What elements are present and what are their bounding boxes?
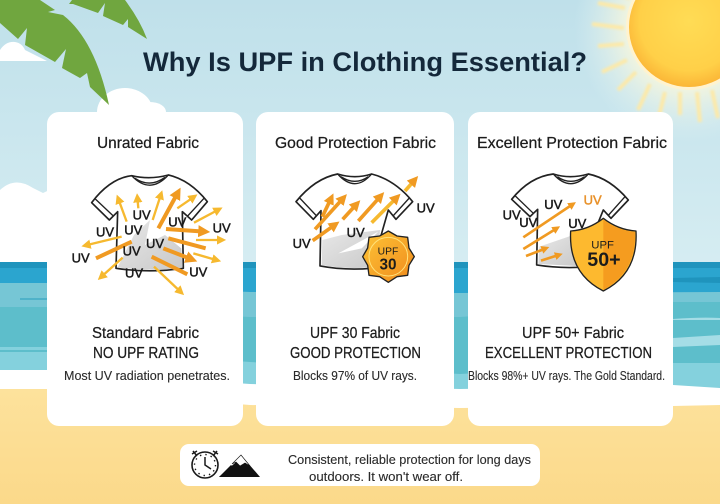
illustration: t-shirt with partial UV block: UV xyxy=(347,225,365,240)
illustration: t-shirt with partial UV block: UV xyxy=(293,236,311,251)
background: sand xyxy=(0,389,720,504)
text: standard fabric: Standard Fabric xyxy=(92,325,199,342)
text: good protection: GOOD PROTECTION xyxy=(290,345,421,362)
background: clouds xyxy=(0,42,166,270)
illustration: t-shirt with UV blocked by shield xyxy=(503,174,636,291)
text: most uv penetrates: Most UV radiation penetrates. xyxy=(64,368,230,383)
illustration: t-shirt with UV passing through: UV xyxy=(213,220,231,235)
badge: UPF 50+ shield: UPF xyxy=(591,240,614,252)
background: sea xyxy=(0,262,720,389)
badge: UPF 30 xyxy=(363,231,414,282)
heading: excellent protection fabric: Excellent Protection Fabric xyxy=(477,135,667,152)
background: sky xyxy=(0,0,720,270)
illustration: t-shirt with UV passing through: UV xyxy=(123,244,141,259)
illustration: t-shirt with UV passing through: UV xyxy=(125,265,143,280)
illustration: t-shirt with UV passing through xyxy=(72,175,231,290)
text: upf 50+ fabric: UPF 50+ Fabric xyxy=(522,325,624,342)
panel: good protection fabric xyxy=(256,112,454,426)
panel: excellent protection fabric xyxy=(468,112,673,426)
background: palm leaves xyxy=(0,0,147,105)
illustration: t-shirt with UV passing through: UV xyxy=(146,236,164,251)
illustration: t-shirt with UV passing through: UV xyxy=(72,250,90,265)
background: foam xyxy=(0,360,720,420)
callout bar: consistent protection xyxy=(180,444,540,486)
text: blocks 98%: Blocks 98%+ UV rays. The Gold Standard. xyxy=(468,368,665,383)
illustration: t-shirt with UV passing through: UV xyxy=(133,208,151,223)
icon: alarm clock xyxy=(192,451,218,478)
illustration: t-shirt with UV blocked by shield: UV xyxy=(503,208,521,223)
text: upf 30 fabric: UPF 30 Fabric xyxy=(310,325,400,342)
badge: UPF 30: UPF xyxy=(378,247,398,258)
heading: unrated fabric: Unrated Fabric xyxy=(97,135,199,152)
title: Why Is UPF in Clothing Essential? xyxy=(143,47,587,77)
text: callout line 2: outdoors. It won't wear off. xyxy=(309,469,463,484)
illustration: t-shirt with UV blocked by shield: UV xyxy=(544,197,563,212)
text: callout line 1: Consistent, reliable protection for long days xyxy=(288,452,531,467)
illustration: t-shirt with partial UV block xyxy=(293,174,435,282)
text: no upf rating: NO UPF RATING xyxy=(93,345,199,362)
panel: unrated fabric xyxy=(47,112,243,426)
illustration: t-shirt with UV blocked by shield: UV xyxy=(584,193,602,208)
illustration: t-shirt with UV passing through: UV xyxy=(168,214,187,229)
illustration: t-shirt with UV passing through: UV xyxy=(96,224,114,239)
icon: mountains xyxy=(219,455,260,477)
badge: UPF 50+ shield xyxy=(571,218,636,291)
heading: good protection fabric: Good Protection Fabric xyxy=(275,135,436,152)
text: excellent protection: EXCELLENT PROTECTION xyxy=(485,345,652,362)
illustration: t-shirt with partial UV block: UV xyxy=(417,200,435,215)
illustration: t-shirt with UV passing through: UV xyxy=(124,223,143,238)
badge: UPF 50+ shield: 50+ xyxy=(587,250,621,271)
background: sun xyxy=(574,0,720,142)
text: blocks 97%: Blocks 97% of UV rays. xyxy=(293,368,417,383)
illustration: t-shirt with UV blocked by shield: UV xyxy=(568,216,587,231)
illustration: t-shirt with UV passing through: UV xyxy=(189,264,208,279)
illustration: t-shirt with UV blocked by shield: UV xyxy=(519,215,538,230)
badge: UPF 30: 30 xyxy=(379,256,397,273)
